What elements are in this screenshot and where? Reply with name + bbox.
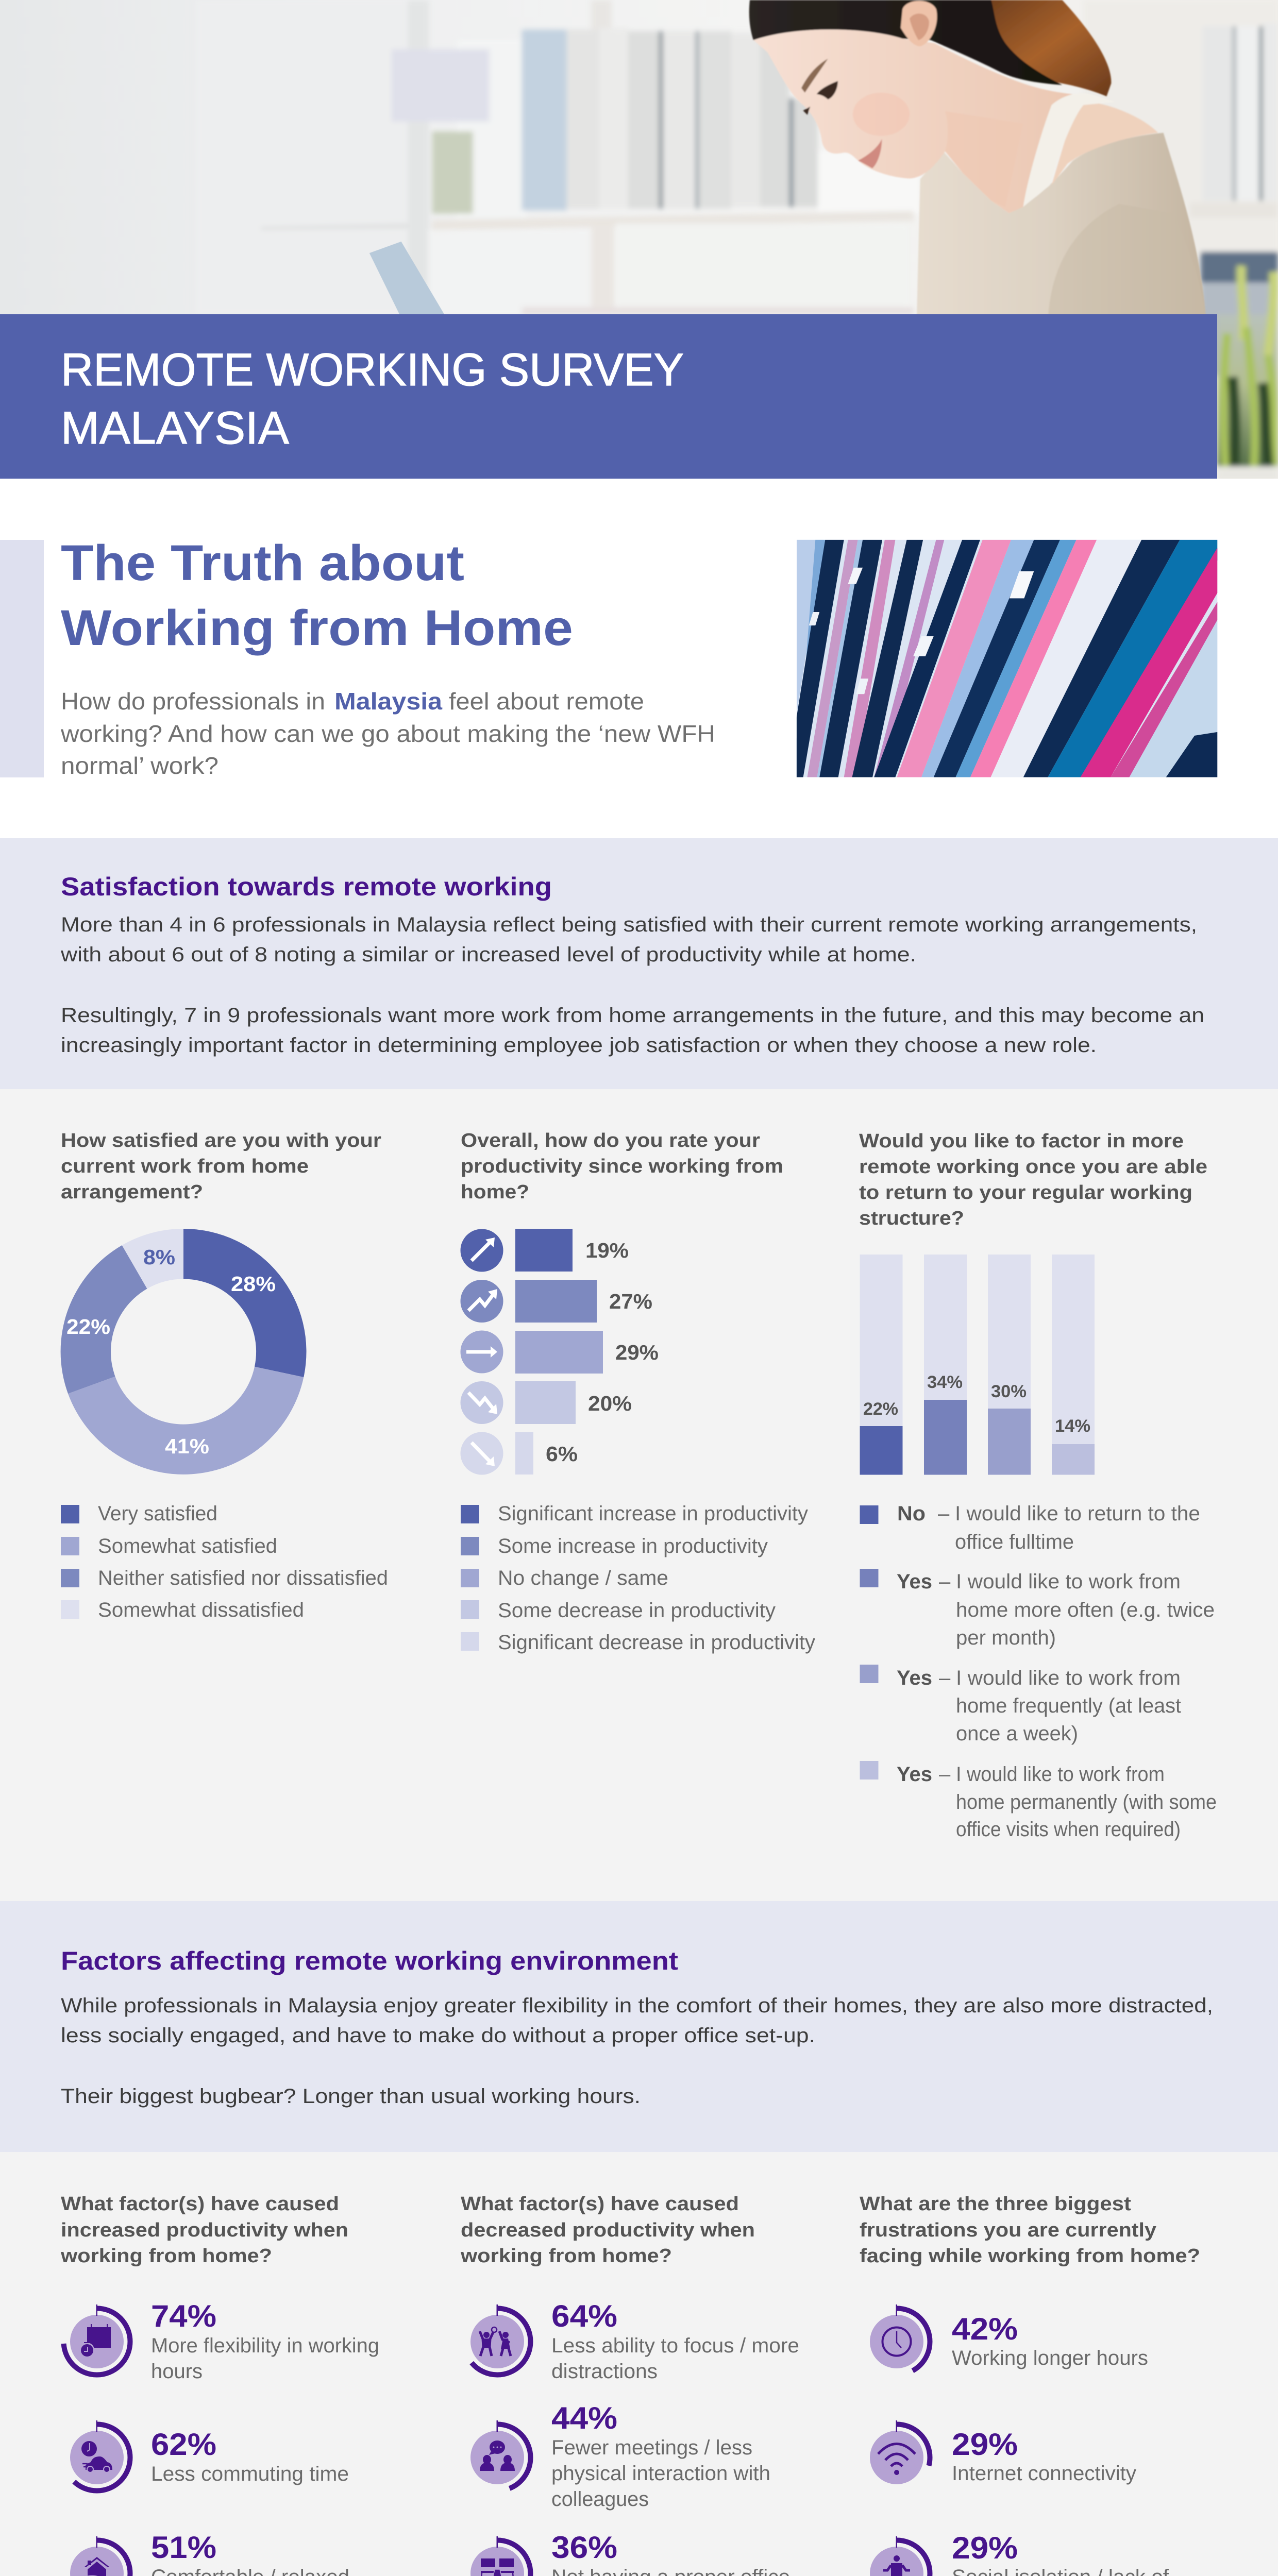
stat: 62% (64, 2420, 349, 2490)
intro paragraph (60, 688, 715, 779)
body text (61, 1994, 1213, 2108)
stat: 64%: Less ability to focus / more (551, 2334, 799, 2357)
stat: 51%: 51% (151, 2530, 216, 2565)
banner title: REMOTE WORKING SURVEY (61, 344, 684, 395)
stat: 44%: Fewer meetings / less (551, 2436, 752, 2459)
body text: While professionals in Malaysia enjoy greater flexibility in the comfort of their homes, they are also more distracted, (61, 1994, 1213, 2017)
donut chart: 28% (231, 1272, 276, 1296)
donut chart: 41% (165, 1434, 209, 1458)
bar chart (515, 1229, 659, 1475)
question: frustrations you are currently (860, 2219, 1156, 2241)
question: decreased productivity when (461, 2219, 755, 2241)
icon: significant decrease (461, 1432, 503, 1475)
eyes (817, 81, 838, 99)
stat: 74%: 74% (151, 2299, 216, 2333)
legend: I would like to return to the (955, 1502, 1200, 1525)
stacked bar chart: 30% (991, 1382, 1027, 1401)
stat: 44%: colleagues (551, 2488, 649, 2511)
legend: once a week) (956, 1722, 1078, 1745)
question: facing while working from home? (860, 2245, 1200, 2267)
bar chart: 6% (546, 1442, 578, 1466)
icon: significant increase (461, 1229, 503, 1272)
stat: 74%: hours (151, 2360, 203, 2383)
question (460, 2193, 755, 2267)
question: Overall, how do you rate your (461, 1130, 760, 1151)
question: What factor(s) have caused (461, 2193, 739, 2215)
donut chart: 8% (143, 1245, 175, 1269)
shoulder (1052, 101, 1158, 185)
stat: 42%: 42% (952, 2312, 1018, 2346)
legend: Significant decrease in productivity (498, 1631, 815, 1654)
section band: factors (0, 1901, 1278, 2152)
question (859, 1130, 1207, 1229)
stat: 64%: 64% (551, 2299, 617, 2333)
legend: Yes (897, 1570, 932, 1593)
hair (749, 0, 1062, 85)
strap (1023, 94, 1098, 207)
question: current work from home (61, 1156, 309, 1177)
neck and face (753, 29, 1073, 213)
stat: 62%: Less commuting time (151, 2463, 349, 2485)
question: What are the three biggest (860, 2193, 1131, 2215)
architecture photo (787, 540, 1217, 777)
intro paragraph: feel about remote (449, 688, 644, 715)
stat: 44% (464, 2401, 770, 2511)
main title: Working from Home (61, 600, 573, 656)
main title: The Truth about (61, 535, 464, 591)
stat: 29% internet: 29% (952, 2427, 1018, 2462)
laptop (369, 242, 444, 314)
question: productivity since working from (461, 1156, 783, 1177)
question (860, 2193, 1200, 2267)
icon: no change (461, 1330, 503, 1374)
panel: future remote working (859, 1130, 1217, 1841)
legend: Yes (897, 1667, 932, 1689)
sweater (917, 133, 1206, 318)
question: to return to your regular working (859, 1182, 1192, 1204)
question (61, 1130, 381, 1203)
legend: Very satisfied (98, 1502, 217, 1525)
stat: 29% internet (864, 2420, 1136, 2490)
panel: decreased productivity (460, 2193, 799, 2576)
legend: per month) (956, 1626, 1056, 1649)
banner title: MALAYSIA (61, 402, 290, 453)
section band: satisfaction (0, 838, 1278, 1089)
stat: 64% (464, 2299, 799, 2383)
question: home? (461, 1181, 529, 1203)
stat: 42% (864, 2304, 1148, 2375)
main title (61, 535, 573, 656)
question: structure? (859, 1208, 964, 1229)
stacked bar chart: 14% (1055, 1416, 1090, 1436)
question: How satisfied are you with your (61, 1130, 381, 1151)
legend: office fulltime (955, 1531, 1074, 1553)
legend (461, 1502, 815, 1654)
intro paragraph: normal’ work? (61, 752, 218, 779)
stacked bar chart: 22% (863, 1399, 898, 1419)
brow (801, 59, 828, 93)
intro paragraph: How do professionals in (61, 688, 325, 715)
intro paragraph: working? And how can we go about making the ‘new WFH (60, 720, 715, 747)
icon: some increase (461, 1280, 503, 1323)
legend: – (938, 1502, 950, 1525)
legend: Yes (897, 1763, 932, 1786)
stat: 44%: physical interaction with (551, 2462, 770, 2485)
legend: I would like to work from (956, 1667, 1181, 1689)
stat: 44%: 44% (551, 2401, 617, 2435)
legend: home frequently (at least (956, 1694, 1181, 1717)
legend (61, 1502, 388, 1621)
legend: office visits when required) (956, 1818, 1181, 1841)
intro accent bar (0, 540, 44, 777)
legend: Somewhat satisfied (98, 1535, 277, 1557)
stat: 29% internet: Internet connectivity (952, 2462, 1136, 2485)
bar chart: 19% (585, 1239, 629, 1262)
donut chart: 22% (66, 1315, 110, 1338)
stat: 36% (464, 2530, 790, 2576)
ponytail (981, 0, 1111, 96)
heading: Satisfaction towards remote working (61, 872, 552, 901)
question: remote working once you are able (859, 1156, 1207, 1178)
question: arrangement? (61, 1181, 203, 1203)
bar chart: 20% (588, 1392, 632, 1415)
body text: with about 6 out of 8 noting a similar or increased level of productivity while at home. (60, 943, 916, 966)
body text: More than 4 in 6 professionals in Malaysia reflect being satisfied with their current remote working arrangements, (61, 913, 1197, 936)
white intro background (0, 479, 1278, 838)
ear (901, 1, 937, 46)
legend: Some increase in productivity (498, 1535, 768, 1557)
stat: 29% social (864, 2531, 1169, 2576)
question (60, 2193, 348, 2267)
panel: frustrations (860, 2193, 1200, 2576)
stat: 36%: 36% (551, 2530, 617, 2565)
heading: Factors affecting remote working environment (61, 1946, 678, 1975)
icon: some decrease (461, 1381, 503, 1424)
question: working from home? (460, 2245, 672, 2267)
legend (860, 1502, 1217, 1841)
stat: 29% social: 29% (952, 2531, 1018, 2565)
question: working from home? (60, 2245, 272, 2267)
stat: 74% (64, 2299, 379, 2383)
legend: I would like to work from (956, 1763, 1165, 1786)
question: Would you like to factor in more (859, 1130, 1184, 1152)
panel: productivity bars (461, 1130, 815, 1654)
legend: No change / same (498, 1567, 668, 1589)
body text: increasingly important factor in determining employee job satisfaction or when they choose a new role. (61, 1034, 1097, 1057)
question (461, 1130, 783, 1203)
legend: No (897, 1502, 926, 1525)
legend: home permanently (with some (956, 1791, 1217, 1814)
bar chart: 29% (615, 1341, 659, 1364)
lips (858, 139, 882, 168)
legend: Significant increase in productivity (498, 1502, 808, 1525)
title banner (0, 314, 1217, 479)
body text: less socially engaged, and have to make do without a proper office set-up. (61, 2024, 815, 2047)
body text: Resultingly, 7 in 9 professionals want more work from home arrangements in the future, and this may become an (61, 1004, 1204, 1027)
stacked bar chart: 34% (927, 1372, 963, 1392)
legend: Somewhat dissatisfied (98, 1599, 304, 1621)
legend: – (939, 1763, 951, 1786)
stat: 64%: distractions (551, 2360, 658, 2383)
body text: Their biggest bugbear? Longer than usual working hours. (61, 2085, 641, 2108)
panel: increased productivity (60, 2193, 379, 2576)
legend: Neither satisfied nor dissatisfied (98, 1567, 388, 1589)
panel: satisfaction donut (61, 1130, 388, 1621)
stat: 51% (64, 2530, 349, 2576)
banner title (61, 344, 684, 453)
stat: 42%: Working longer hours (952, 2347, 1148, 2369)
legend: home more often (e.g. twice (956, 1599, 1215, 1621)
intro paragraph: Malaysia (334, 688, 442, 715)
stat: 74%: More flexibility in working (151, 2334, 379, 2357)
legend: I would like to work from (956, 1570, 1181, 1593)
bar chart: 27% (609, 1290, 652, 1313)
body text (60, 913, 1204, 1057)
legend: – (939, 1667, 951, 1689)
stacked bar chart (860, 1255, 1095, 1475)
question: What factor(s) have caused (61, 2193, 339, 2215)
question: increased productivity when (61, 2219, 348, 2241)
stat: 62%: 62% (151, 2427, 216, 2462)
hero photo: woman working at laptop (0, 0, 1278, 482)
donut chart (61, 1229, 307, 1475)
legend: Some decrease in productivity (498, 1599, 776, 1622)
legend: – (939, 1570, 951, 1593)
